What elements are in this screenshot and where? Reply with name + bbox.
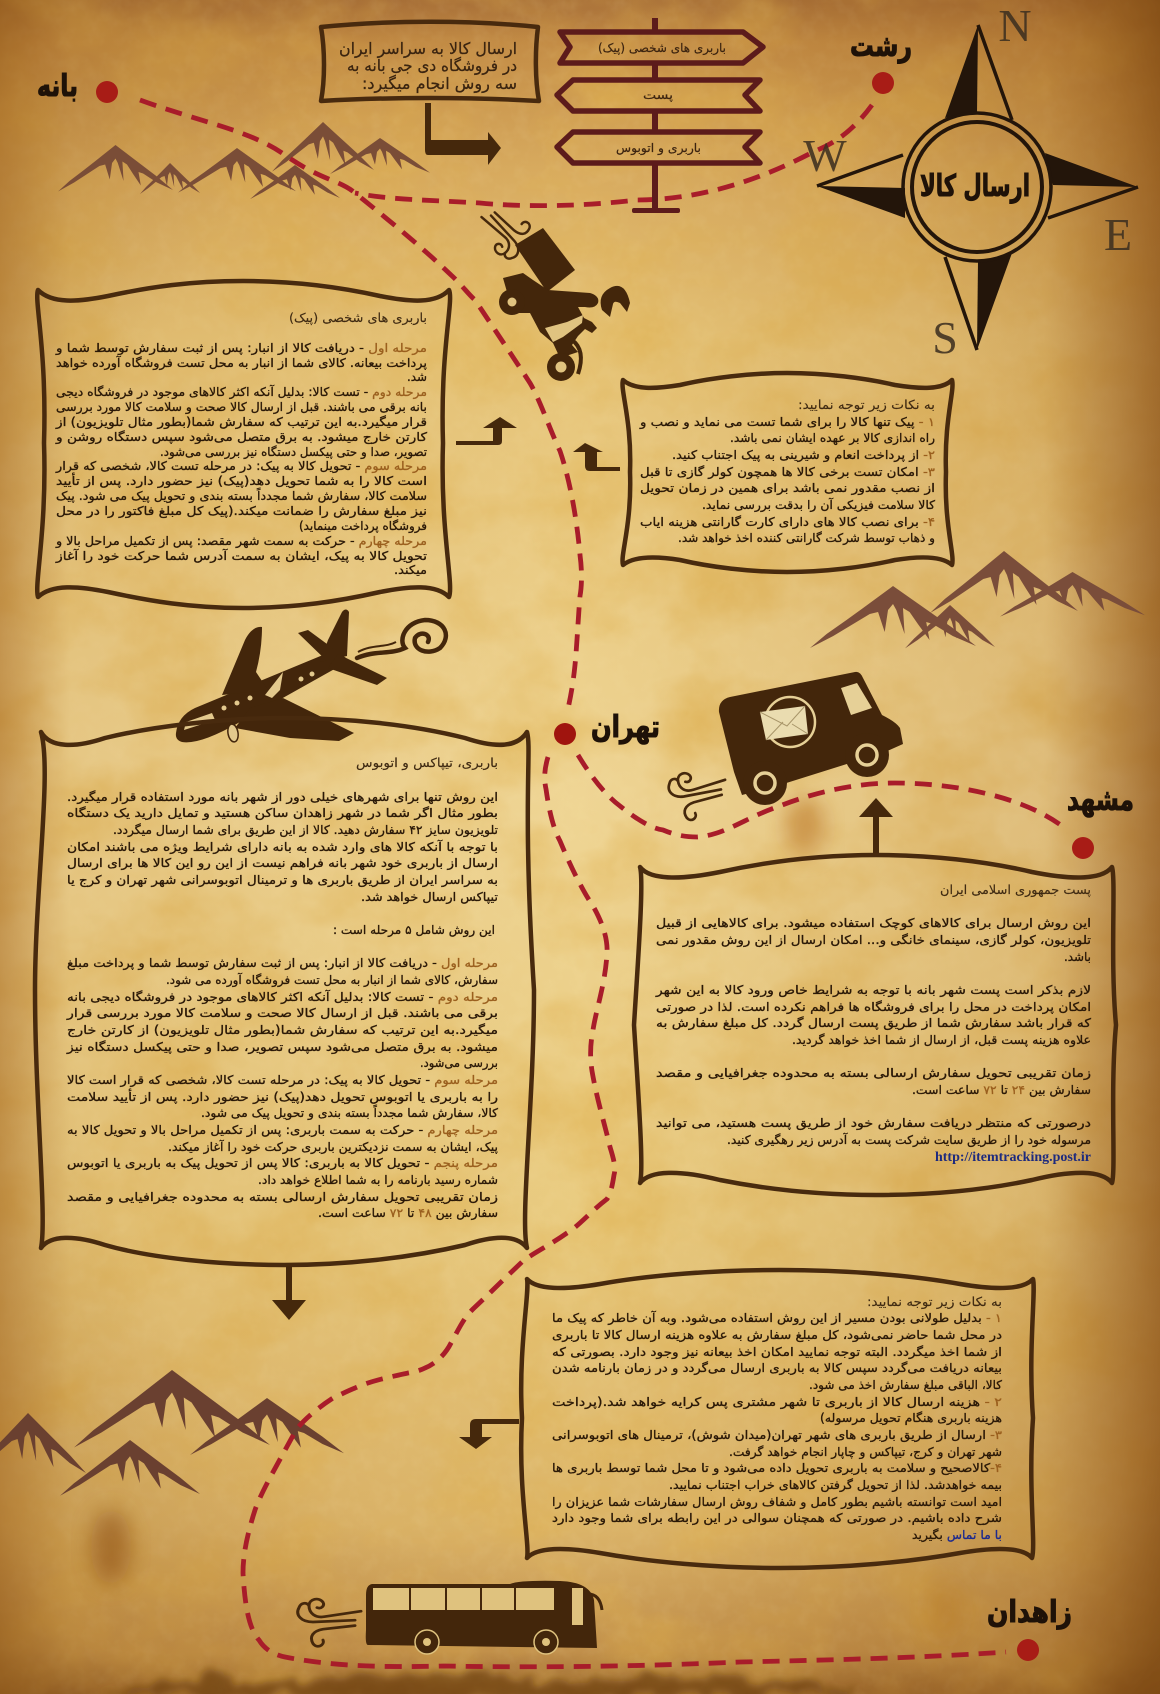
- icon: bus: [366, 1581, 602, 1654]
- intro box: ارسال کالا به سراسر ایران: [339, 39, 517, 59]
- city marker: Zahedan: زاهدان: [987, 1595, 1072, 1630]
- city marker: Rasht: [850, 29, 912, 94]
- panel: freight, tipax and bus: [35, 718, 534, 1265]
- panel: final notes: ۴-کالاصحیح و سلامت به باربری تحویل داده می‌شود و تا محل شما توسط باربری ها: [552, 1461, 1002, 1476]
- panel: personal courier: سلامت کالا، سفارش شما مجدداً بسته بندی و تحویل پیک می شود. پیک: [56, 487, 427, 504]
- panel: personal courier: پرداخت بیعانه. کالای شما از انبار به محل تست فروشگاه آورده خواهد: [56, 355, 427, 371]
- intro box: سه روش انجام میگیرد:: [362, 74, 517, 94]
- city marker: Rasht: رشت: [850, 29, 912, 64]
- panel: national post: لازم بذکر است پست شهر بانه با توجه به شرایط خاص ورود کالا به این شهر: [655, 983, 1091, 998]
- mountains: top left: [58, 122, 430, 199]
- panel: personal courier: میکند.: [394, 563, 427, 577]
- panel: final notes: با ما تماس بگیرید: [912, 1528, 1002, 1543]
- city marker: Bane: [37, 69, 118, 104]
- panel: freight, tipax and bus: مرحله سوم - تحویل کالا به پیک: در مرحله تست کالا، شخصی که قرار است کالا: [67, 1073, 498, 1088]
- compass rose: N: [998, 0, 1032, 51]
- panel: national post: مرسوله خود را از طریق سایت شرکت پست به آدرس زیر رهگیری کنید.: [727, 1132, 1091, 1148]
- city marker: Zahedan: [987, 1595, 1072, 1661]
- panel: personal courier: باربری های شخصی (پیک): [289, 310, 427, 326]
- panel: personal courier: تحویل کالا به پیک، ایشان به سمت آدرس شما حرکت خود را آغاز: [55, 548, 427, 564]
- panel: personal courier: شد.: [407, 370, 427, 384]
- panel: personal courier: مرحله چهارم - حرکت به سمت شهر مقصد: پس از تکمیل مراحل بالا و: [55, 534, 427, 549]
- sign: post: پست: [643, 88, 673, 102]
- panel: courier notes: ۱ - پیک تنها کالا را برای شما تست می نماید و نصب و: [639, 415, 935, 430]
- panel: national post: درصورتی که منتظر دریافت سفارش خود از طریق پست هستید، می توانید: [656, 1116, 1091, 1131]
- panel: national post: باشد.: [1064, 950, 1091, 964]
- compass rose: E: [1104, 209, 1132, 260]
- sign: personal courier: [560, 32, 763, 63]
- panel: personal courier: [37, 281, 450, 608]
- compass rose: [803, 0, 1138, 363]
- intro box: در فروشگاه دی جی بانه به: [347, 56, 517, 76]
- signpost: [557, 18, 763, 213]
- compass rose: W: [803, 130, 847, 181]
- arrow: freight panel down: [272, 1266, 306, 1320]
- panel: freight, tipax and bus: پیک، ایشان به سمت نزدیکترین باربری حرکت خود را آغاز میکند.: [168, 1139, 498, 1155]
- panel: courier notes: [623, 373, 953, 572]
- panel: final notes: بیعانه دریافت می‌گردد سپس کالا به باربری ارسال می‌گردد و در زمان بارنامه شدن: [552, 1361, 1002, 1376]
- city marker: Bane: بانه: [37, 69, 78, 104]
- route: Bane to Tehran: [140, 100, 582, 713]
- arrow: notes panel to courier: [573, 443, 620, 471]
- panel: final notes: شرح داده باشیم. در صورتی که همچنان سوالی در این رابطه برای شما وجود دارد: [552, 1511, 1002, 1526]
- panel: courier notes: ۴- برای نصب کالا های دارای کارت گارانتی هزینه ایاب: [640, 515, 935, 530]
- panel: freight, tipax and bus: بطور مثال اگر شما در شهر زاهدان ساکن هستید و تمایل دارید یک دستگاه: [67, 806, 498, 821]
- panel: final notes: هزینه باربری هنگام تحویل مرسوله): [820, 1411, 1002, 1426]
- city marker: Mashhad: مشهد: [1067, 783, 1134, 818]
- panel: freight, tipax and bus: تیپاکس ارسال خواهد شد.: [361, 890, 498, 905]
- panel: national post: این روش ارسال برای کالاهای کوچک استفاده میشود. برای کالاهایی از قبیل: [656, 916, 1091, 931]
- icon: mail van: [719, 672, 903, 805]
- panel: freight, tipax and bus: مرحله اول - دریافت کالا از انبار: پس از ثبت سفارش توسط شما و پرداخت مبلغ: [67, 956, 498, 971]
- panel: personal courier: قرار میگیرد.به این ترتیب که سفارش شما(بطور مثال تلویزیون) از: [55, 415, 427, 430]
- mountains: middle right: [810, 551, 1145, 648]
- panel: final notes: بیمه خواهدشد. لذا از تحویل گرفتن کالاهای خراب اجتناب نمایید.: [669, 1478, 1002, 1493]
- panel: personal courier: مرحله دوم - تست کالا: بدلیل آنکه اکثر کالاهای موجود در فروشگاه دیجی: [56, 384, 427, 400]
- panel: freight, tipax and bus: میگیرد.به این ترتیب که سفارش شما(بطور مثال تلویزیون) از کارتن خارج: [67, 1023, 498, 1038]
- panel: final notes: امید است توانسته باشیم بطور کامل و شفاف روش ارسال سفارشات شما عزیزان را: [552, 1495, 1002, 1510]
- panel: final notes: از شما اخذ میگردد. البته توجه نمایید امکان اخذ بیعانه نیز وجود دارد. بصورتی که: [552, 1345, 1002, 1360]
- arrow: final notes panel left: [459, 1419, 519, 1449]
- panel: freight, tipax and bus: مرحله چهارم - حرکت به سمت باربری: پس از تکمیل مراحل بالا و تحویل کالا به: [67, 1123, 498, 1138]
- panel: freight, tipax and bus: سفارش بین ۴۸ تا ۷۲ ساعت است.: [318, 1206, 498, 1221]
- panel: freight, tipax and bus: برقی می باشند. قبل از ارسال کالا صحت و سلامت کالا مورد بررسی قرار: [66, 1006, 498, 1021]
- mountains: lower left: [0, 1370, 344, 1496]
- panel: final notes: ۱ - بدلیل طولانی بودن مسیر از این روش استفاده می‌شود. وبه آن خاطر که پیک ما: [552, 1310, 1002, 1326]
- panel: freight, tipax and bus: با توجه با آنکه کالا های وارد شده به بانه دارای شرایط ویژه می باشند امکان: [67, 839, 498, 855]
- panel: final notes: ۳- ارسال از طریق باربری های شهر تهران(میدان شوش)، ترمینال های اتوبوسرانی: [552, 1428, 1003, 1443]
- panel: final notes: در محل شما حاضر نمی‌شود، کل مبلغ سفارش به علاوه هزینه ارسال کالا تا باربری: [552, 1328, 1002, 1343]
- icon: wind by bus: [298, 1599, 361, 1646]
- panel: courier notes: راه اندازی کالا بر عهده ایشان نمی باشد.: [730, 431, 935, 446]
- panel: courier notes: ۳- امکان تست برخی کالا ها همچون کولر گازی تا قبل: [640, 465, 936, 480]
- sign: post: [557, 80, 760, 111]
- compass rose: ارسال کالا: [920, 169, 1030, 204]
- panel: personal courier: کارتن خارج میشود. به برق متصل می‌شود سپس دستگاه روشن و: [55, 430, 427, 445]
- panel: final notes: ۲ - هزینه ارسال کالا از باربری تا شهر مشتری پس کرایه خواهد شد.(پرداخت: [552, 1395, 1002, 1410]
- panel: national post: [634, 855, 1116, 1195]
- panel: national post: که قرار باشد سفارش شما از طریق پست ارسال گردد. کل مبلغ سفارش به: [656, 1016, 1091, 1031]
- panel: freight, tipax and bus: ارسال از باربری خود شهر بانه فراهم نیست از این رو این کالا ها برای ارسال: [67, 856, 498, 871]
- arrow: post panel up: [859, 798, 893, 855]
- route: Tehran to Mashhad: [578, 755, 1062, 837]
- panel: personal courier: است کالا را به شما تحویل دهد(پیک) نیز حضور دارد. پس از تأیید: [56, 472, 427, 489]
- compass rose: S: [932, 312, 958, 363]
- icon: airplane with swirl: [176, 610, 446, 743]
- icon: wind by van: [667, 768, 730, 822]
- panel: final notes: [521, 1270, 1034, 1568]
- panel: personal courier: تصویر، صدا و حتی پیکسل دستگاه نیز بررسی می‌شود.: [160, 445, 427, 460]
- panel: freight, tipax and bus: مرحله پنجم - تحویل کالا به باربری: کالا پس از تحویل پیک به باربری یا اتوبوس: [67, 1156, 498, 1171]
- panel: national post: تلویزیون، کولر گازی، سینمای خانگی و... امکان ارسال از این روش مقدور نمی: [656, 933, 1091, 948]
- panel: freight, tipax and bus: کالا، سفارش شما مجدداً بسته بندی و تحویل پیک می شود.: [201, 1104, 498, 1121]
- panel: national post: امکان پرداخت در محل را برای فروشگاه ها فراهم نکرده است. لذا در صورتی: [656, 1000, 1091, 1015]
- panel: freight, tipax and bus: این روش تنها برای شهرهای خیلی دور از شهر بانه مورد استفاده قرار میگیرد.: [67, 790, 498, 805]
- panel: freight, tipax and bus: بررسی می‌شود.: [420, 1056, 498, 1071]
- panel: freight, tipax and bus: این روش شامل ۵ مرحله است :: [333, 923, 495, 938]
- intro box: [321, 22, 539, 101]
- panel: national post: علاوه هزینه پست قبل، از ارسال از شما اخذ خواهد گردید.: [792, 1033, 1091, 1048]
- panel: final notes: به نکات زیر توجه نمایید:: [867, 1294, 1002, 1310]
- panel: final notes: شهر تهران و کرج، تیپاکس و چاپار انجام خواهد گرفت.: [729, 1445, 1002, 1460]
- panel: courier notes: ۲- از پرداخت انعام و شیرینی به پیک اجتناب کنید.: [672, 448, 935, 463]
- panel: freight, tipax and bus: سفارش، کالای شما از انبار به محل تست فروشگاه آورده می شود.: [166, 972, 498, 988]
- panel: freight, tipax and bus: باربری، تیپاکس و اتوبوس: [356, 755, 498, 771]
- arrow: intro to signpost: [425, 103, 501, 165]
- sign: freight and bus: [557, 132, 760, 163]
- panel: courier notes: از نصب مقدور نمی باشد برای همین در زمان تحویل: [640, 481, 935, 496]
- panel: final notes: کالا، الباقی مبلغ سفارش اخذ می شود.: [809, 1378, 1002, 1393]
- panel: national post: سفارش بین ۲۴ تا ۷۲ ساعت است.: [912, 1083, 1091, 1098]
- arrow: courier panel up: [456, 417, 517, 445]
- icon: courier scooter: [499, 228, 630, 381]
- panel: national post: زمان تقریبی تحویل سفارش ارسالی بسته به محدوده جغرافیایی و مقصد: [656, 1066, 1091, 1081]
- icon: wind by scooter: [473, 197, 539, 264]
- panel: national post: پست جمهوری اسلامی ایران: [940, 882, 1092, 898]
- panel: courier notes: به نکات زیر توجه نمایید:: [798, 397, 935, 413]
- panel: freight, tipax and bus: میشود. به برق متصل می‌شود سپس تصویر، صدا و حتی پیکسل دستگاه نیز: [66, 1040, 498, 1055]
- sign: personal courier: باربری های شخصی (پیک): [598, 41, 726, 56]
- panel: freight, tipax and bus: به سراسر ایران از طریق باربری ها و ترمینال اتوبوسرانی شهر تهران و کرج یا: [67, 873, 498, 888]
- panel: freight, tipax and bus: زمان تقریبی تحویل سفارش ارسالی بسته به محدوده جغرافیایی و مقصد: [67, 1190, 498, 1205]
- panel: freight, tipax and bus: مرحله دوم - تست کالا: بدلیل آنکه اکثر کالاهای موجود در فروشگاه دیجی بانه: [67, 989, 498, 1005]
- panel: personal courier: فروشگاه پرداخت مینماید): [299, 519, 427, 534]
- panel: personal courier: نیز مبلغ سفارش را ضمانت میکند.(پیک کل مبلغ فاکتور را در محل: [56, 504, 427, 519]
- panel: national post: http://itemtracking.post.ir: [935, 1149, 1091, 1164]
- panel: personal courier: بانه برقی می باشند. قبل از ارسال کالا صحت و سلامت کالا مورد بررسی: [56, 400, 427, 415]
- sign: freight and bus: باربری و اتوبوس: [616, 141, 701, 156]
- city marker: Tehran: تهران: [591, 710, 660, 745]
- route: Tehran to Zahedan: [243, 757, 1006, 1667]
- panel: personal courier: مرحله سوم - تحویل کالا به پیک: در مرحله تست کالا، شخصی که قرار: [55, 459, 427, 474]
- city marker: Mashhad: [1067, 783, 1134, 859]
- panel: courier notes: کالا سلامت فیزیکی آن را بدقت بررسی نماید.: [702, 497, 935, 513]
- route: Rasht to junction: [355, 105, 872, 206]
- panel: personal courier: مرحله اول - دریافت کالا از انبار: پس از ثبت سفارش توسط شما و: [55, 341, 427, 356]
- panel: courier notes: و ذهاب توسط شرکت گارانتی کننده اخذ خواهد شد.: [678, 531, 935, 546]
- panel: freight, tipax and bus: تلویزیون سایز ۴۲ سفارش دهید. کالا از این طریق برای شما ارسال میگردد.: [113, 823, 498, 838]
- city marker: Tehran: [554, 710, 660, 745]
- panel: freight, tipax and bus: شماره رسید بارنامه را به شما اطلاع خواهد داد.: [258, 1173, 498, 1188]
- panel: freight, tipax and bus: را به باربری یا اتوبوس تحویل دهد(پیک) نیز حضور دارد. پس از تأیید سلامت: [67, 1088, 498, 1105]
